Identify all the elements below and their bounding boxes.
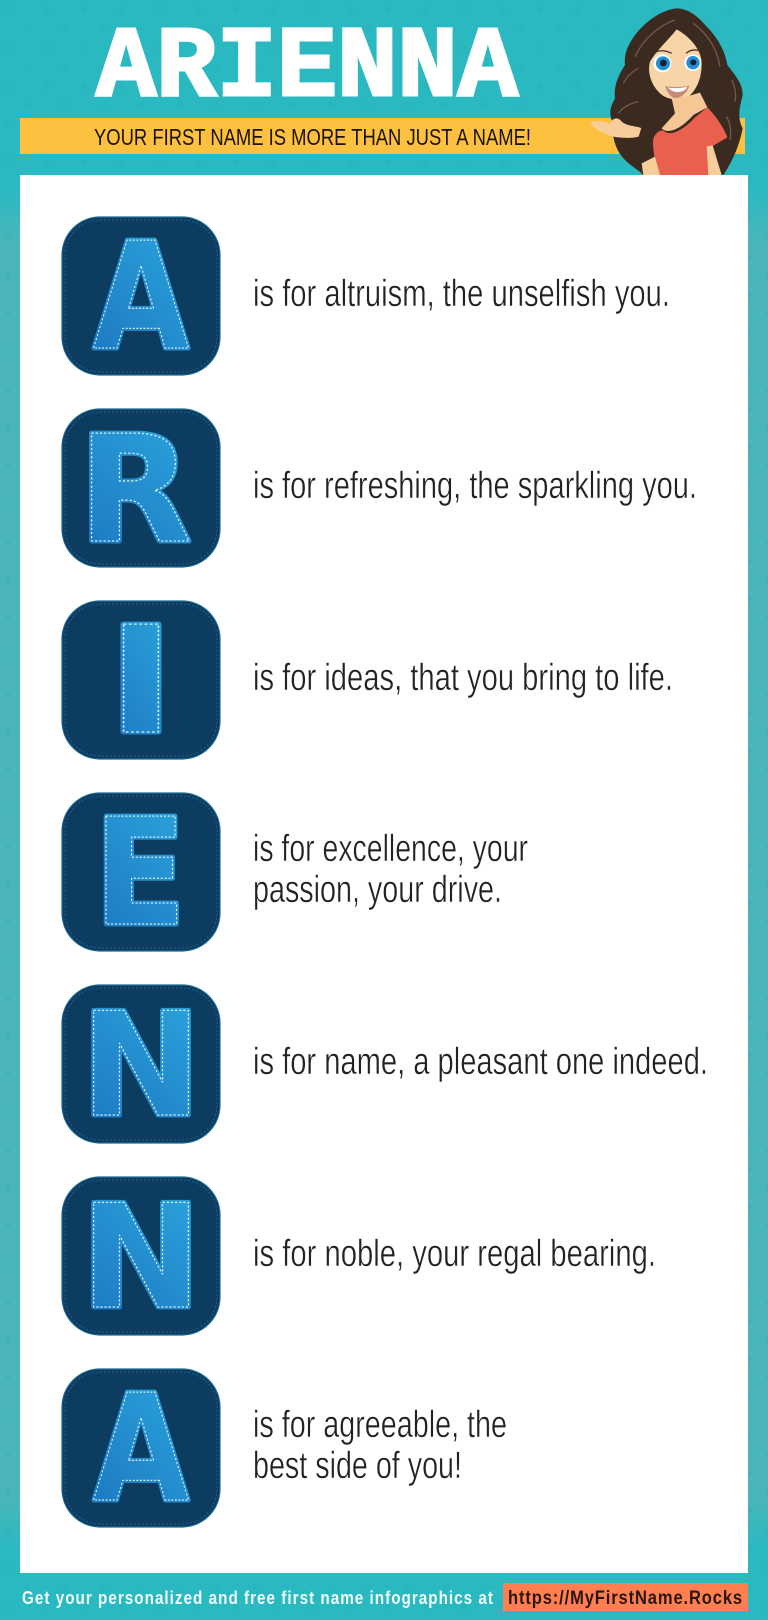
illustration: woman presenting bbox=[590, 8, 743, 175]
footer text: Get your personalized and free first name infographics at bbox=[22, 1588, 494, 1608]
tile: A second: A bbox=[93, 1364, 189, 1536]
text: E: is for excellence, your bbox=[253, 828, 528, 870]
tile: I: I bbox=[107, 595, 175, 767]
footer link badge bbox=[503, 1583, 748, 1611]
row: letter N second bbox=[62, 1175, 656, 1342]
tile: N second: N bbox=[80, 1175, 202, 1342]
tile: A second: A bbox=[93, 1364, 189, 1536]
tile: A: A bbox=[93, 212, 189, 384]
tile: E: E bbox=[93, 787, 187, 959]
tile: N second: N bbox=[80, 1175, 202, 1342]
tile: I bbox=[62, 595, 220, 767]
row: letter E bbox=[62, 787, 528, 959]
row: letter I bbox=[62, 595, 673, 767]
tile: E: E bbox=[93, 787, 187, 959]
tile: A bbox=[62, 212, 220, 384]
tile: N: N bbox=[80, 983, 202, 1150]
tile: A: A bbox=[93, 212, 189, 384]
row: letter N bbox=[62, 983, 708, 1150]
text: E: passion, your drive. bbox=[253, 869, 502, 911]
tile: E bbox=[62, 787, 220, 959]
text: A second bbox=[253, 1404, 507, 1487]
row: letter R bbox=[62, 404, 697, 576]
tile: I: I bbox=[107, 595, 175, 767]
subtitle banner: YOUR FIRST NAME IS MORE THAN JUST A NAME! bbox=[94, 124, 531, 150]
row: letter A second bbox=[62, 1364, 507, 1536]
subtitle banner bbox=[20, 118, 745, 154]
row: letter A bbox=[62, 212, 670, 384]
tile: R: R bbox=[78, 404, 192, 576]
tile: A second bbox=[62, 1364, 220, 1536]
text: N second: is for noble, your regal bearing. bbox=[253, 1233, 656, 1275]
text: A second: best side of you! bbox=[253, 1445, 462, 1487]
footer bbox=[22, 1583, 748, 1611]
tile: N: N bbox=[80, 983, 202, 1150]
title: ARIENNA bbox=[96, 13, 519, 126]
text: E bbox=[253, 828, 528, 911]
text: A second: is for agreeable, the bbox=[253, 1404, 507, 1446]
tile: R: R bbox=[78, 404, 192, 576]
